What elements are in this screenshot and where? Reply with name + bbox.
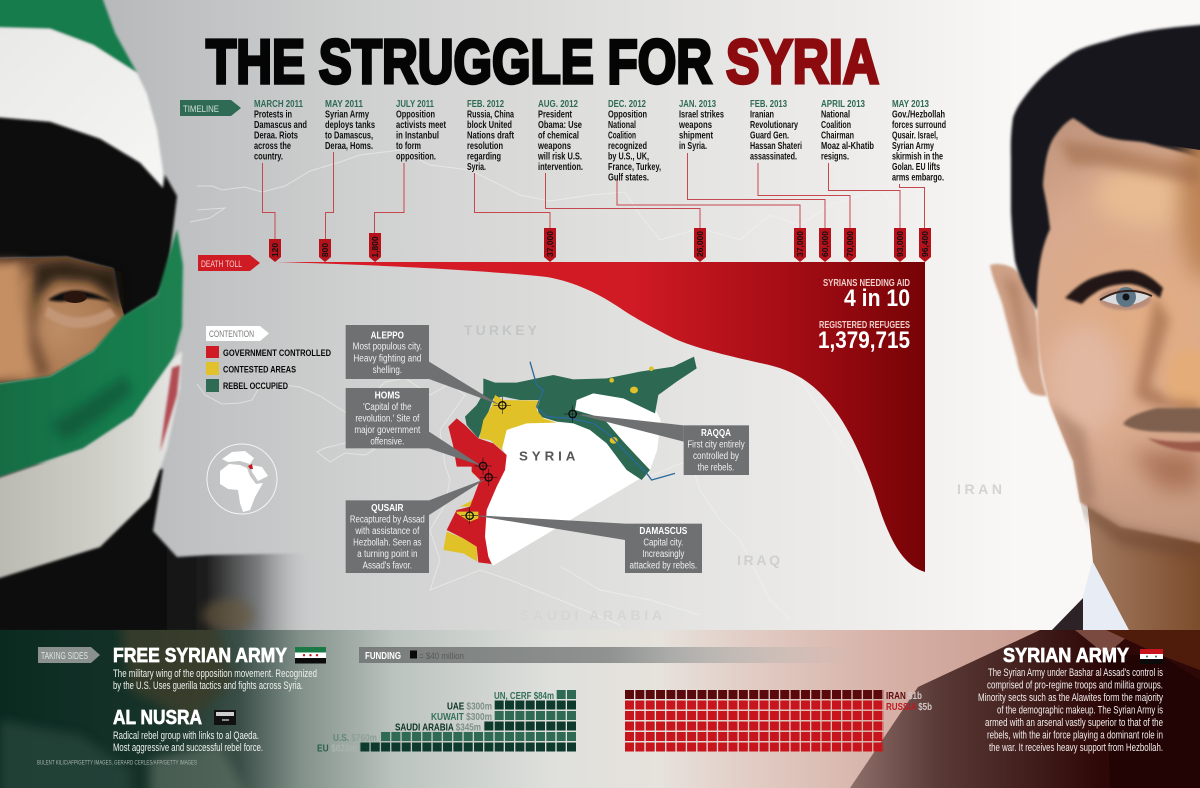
timeline event: May 2013: Gov./Hezbollah [892, 110, 945, 120]
callout: Aleppo: Heavy fighting and [353, 353, 421, 364]
chart: opposition funding labels: UAE $300m [447, 700, 492, 712]
chart: government funding labels [886, 690, 932, 713]
icon: Al Nusra flag [214, 710, 236, 725]
timeline event: Jan 2013: weapons [678, 120, 712, 131]
callout: Damascus: attacked by rebels. [629, 561, 697, 572]
timeline event: July 2011: JULY 2011 [396, 99, 434, 110]
timeline event: Aug 2012: Obama: Use [538, 120, 582, 131]
timeline event: Dec 2012 [608, 99, 661, 184]
timeline arrow [180, 100, 241, 116]
map: contested spots [609, 366, 654, 444]
timeline event: April 2013 [821, 99, 874, 162]
chart: opposition funding labels [317, 690, 554, 754]
timeline event: May 2013: MAY 2013 [892, 99, 929, 110]
statistic: registered refugees: 1,379,715 [818, 327, 910, 354]
timeline event: July 2011: activists meet [396, 120, 446, 131]
chart: opposition funding labels: KUWAIT $300m [431, 711, 492, 723]
callout: Aleppo: Most populous city. [353, 342, 422, 353]
black band [0, 116, 177, 318]
timeline event: Feb 2012: FEB. 2012 [467, 99, 504, 110]
green scarf [0, 229, 183, 484]
hair [1011, 22, 1200, 310]
text: Free Syrian Army description: The military wing of the opposition movement. Recognized [113, 668, 317, 680]
timeline event: May 2013 [892, 99, 946, 184]
timeline event: May 2013: Syrian Army [892, 141, 934, 152]
photo: Bashar al-Assad [990, 22, 1200, 632]
lower white band [0, 351, 182, 584]
taking sides arrow [38, 647, 100, 663]
timeline event: Dec 2012: Coalition [608, 130, 636, 142]
country label: Iraq: IRAQ [737, 552, 780, 568]
death toll markers: 96,400 [920, 231, 930, 257]
timeline event: May 2013: forces surround [892, 120, 946, 131]
icon: locator globe [207, 444, 277, 514]
timeline event: Aug 2012: intervention. [538, 162, 583, 173]
chart: opposition funding labels: EU $820m [317, 742, 357, 754]
timeline event: March 2011: country. [254, 152, 283, 162]
timeline event: Dec 2012: Gulf states. [608, 172, 649, 184]
timeline event: March 2011: Deraa. Riots [254, 130, 298, 142]
face skin [1037, 118, 1200, 547]
chart: government funding squares [625, 694, 884, 747]
background map borders [190, 150, 1010, 625]
callout: Damascus: Increasingly [642, 549, 684, 560]
callout: Qusair: Hezbollah. Seen as [353, 537, 422, 548]
clothing below the mask [0, 460, 320, 632]
map: government controlled areas [447, 418, 507, 564]
death toll markers: 120 [270, 243, 280, 257]
timeline event: May 2013: Golan. EU lifts [892, 162, 940, 173]
callout: Aleppo: ALEPPO [371, 330, 404, 341]
callout: Qusair: a turning point in [357, 549, 417, 560]
death toll markers: 37,000 [545, 231, 555, 257]
death toll arrow: DEATH TOLL [201, 259, 242, 270]
funding legend bar: = $40 million [419, 651, 464, 662]
timeline connector lines [262, 152, 924, 240]
timeline event: July 2011: opposition. [396, 152, 436, 162]
text: Free Syrian Army description [113, 668, 317, 692]
timeline event: May 2011: to Damascus, [325, 130, 373, 142]
timeline event: Feb 2013: Revolutionary [750, 120, 798, 131]
eyebrow [1065, 270, 1163, 304]
timeline event: May 2013: skirmish in the [892, 152, 943, 162]
map: rebel occupied areas [465, 357, 697, 480]
mustache [1123, 408, 1200, 433]
timeline event: Dec 2012: National [608, 120, 636, 131]
legend: contention: GOVERNMENT CONTROLLED [223, 348, 331, 359]
callout: Qusair: QUSAIR [371, 503, 404, 514]
timeline event: May 2013: Qusair. Israel, [892, 130, 938, 142]
timeline event: Jan 2013: in Syria. [679, 141, 707, 152]
legend: contention: CONTESTED AREAS [223, 364, 296, 376]
timeline event: May 2011: Deraa, Homs. [325, 141, 373, 152]
legend: contention: REBEL OCCUPIED [223, 381, 288, 392]
timeline event: Jan 2013: Israel strikes [679, 110, 724, 120]
chart: opposition funding squares [359, 694, 576, 747]
chart: opposition funding labels: U.S. $760m [333, 732, 377, 744]
heading: Syrian Army: SYRIAN ARMY [1003, 645, 1130, 667]
timeline event: Aug 2012 [537, 99, 583, 173]
chart: government funding labels: IRAN $1b [886, 690, 922, 702]
chart: opposition funding labels: UN, CERF $84m [494, 690, 554, 702]
timeline event: Jan 2013: shipment [679, 130, 714, 142]
map of Syria [346, 325, 749, 573]
chart: government funding labels: RUSSIA $5b [886, 701, 932, 713]
country label: Iran: IRAN [957, 481, 1002, 497]
callout: Damascus: Capital city. [643, 538, 683, 549]
callout: Raqqa: the rebels. [698, 463, 734, 474]
timeline event: April 2013: Chairman [821, 130, 854, 142]
timeline event: Dec 2012: DEC. 2012 [608, 99, 646, 110]
callout: Homs: revolution.' Site of [355, 414, 420, 425]
map: contested areas [443, 395, 557, 562]
timeline event: April 2013: Moaz al-Khatib [821, 141, 874, 152]
death toll markers: 1,800 [370, 236, 380, 258]
timeline arrow: TIMELINE [183, 104, 219, 115]
text: Al Nusra description [113, 730, 263, 754]
timeline event: Feb 2013: assassinated. [750, 152, 797, 162]
timeline event: Dec 2012: France, Turkey, [608, 162, 661, 173]
timeline event: Aug 2012: weapons [537, 141, 571, 152]
bottom strip [0, 620, 1200, 788]
funding legend bar [359, 647, 859, 663]
text: Syrian Army description [978, 667, 1163, 754]
timeline event: July 2011 [396, 99, 446, 162]
photo: masked rebel fighter [0, 0, 320, 632]
death toll markers: 26,000 [695, 231, 705, 257]
timeline event: March 2011 [254, 99, 307, 162]
callout: Raqqa: controlled by [693, 451, 739, 462]
icon: Syrian flag [1140, 649, 1163, 664]
map: city targets [461, 397, 581, 524]
title: THE STRUGGLE FOR [206, 28, 712, 97]
eye [48, 290, 112, 302]
callout: Aleppo [346, 325, 500, 405]
timeline event: April 2013: resigns. [821, 152, 849, 162]
death toll wedge chart [276, 262, 925, 572]
map: government-free white area [485, 393, 660, 565]
statistic: Syrians needing aid [823, 278, 910, 312]
timeline event: Feb 2013: FEB. 2013 [750, 99, 787, 110]
timeline event: July 2011: to form [396, 141, 421, 152]
hat green [0, 0, 137, 73]
heading: Al Nusra: AL NUSRA [113, 707, 202, 729]
callout: Homs: 'Capital of the [363, 402, 412, 413]
country label: Saudi Arabia: SAUDI ARABIA [520, 607, 662, 623]
callout: Raqqa: RAQQA [701, 428, 731, 439]
timeline event: May 2013: arms embargo. [892, 172, 944, 184]
statistic: Syrians needing aid: SYRIANS NEEDING AID [823, 278, 910, 289]
map: Damascus contested pocket [457, 512, 478, 522]
callout: Homs: major government [354, 425, 421, 436]
funding legend bar: FUNDING [365, 651, 401, 662]
timeline event: March 2011: Protests in [254, 110, 292, 120]
callout: Homs [346, 388, 482, 466]
timeline event: Jan 2013 [678, 99, 724, 152]
mouth [1147, 438, 1200, 452]
timeline event: Feb 2013 [750, 99, 802, 162]
face opening [0, 257, 125, 386]
timeline event: Feb 2013: Guard Gen. [750, 130, 789, 142]
death toll arrow [198, 255, 260, 271]
callout: Raqqa: First city entirely [687, 440, 745, 451]
death toll markers: 60,000 [820, 231, 830, 257]
timeline event: May 2011: deploys tanks [325, 120, 375, 131]
timeline event: May 2011: MAY 2011 [325, 99, 363, 110]
death toll markers: 37,000 [795, 231, 805, 257]
callout: Qusair: with assistance of [355, 526, 420, 537]
timeline event: Aug 2012: AUG. 2012 [538, 99, 578, 110]
timeline event: April 2013: Coalition [821, 120, 851, 131]
ear [990, 264, 1047, 396]
timeline event: Feb 2013: Iranian [750, 110, 774, 120]
legend: contention: CONTENTION [209, 329, 254, 340]
hat white band [0, 27, 163, 192]
callout: Damascus: DAMASCUS [639, 526, 687, 537]
text: Free Syrian Army description: by the U.S. Uses guerilla tactics and fights across Syria. [113, 680, 303, 692]
death toll markers [269, 228, 931, 262]
statistic: registered refugees: REGISTERED REFUGEES [819, 320, 910, 331]
timeline event: July 2011: Opposition [396, 110, 435, 120]
timeline event: March 2011: MARCH 2011 [254, 99, 303, 110]
callout: Raqqa [573, 413, 749, 475]
timeline event: April 2013: National [821, 110, 850, 120]
callout: Qusair: Recaptured by Assad [350, 515, 425, 526]
timeline event: March 2011: across the [254, 141, 291, 152]
icon: Free Syrian Army flag [295, 647, 326, 664]
title: SYRIA [726, 28, 879, 97]
death toll markers: 800 [320, 243, 330, 257]
text: Al Nusra description: Most aggressive and successful rebel force. [113, 742, 263, 754]
timeline event: Feb 2012 [467, 99, 515, 173]
callout: Homs: HOMS [375, 390, 400, 401]
text: Al Nusra description: Radical rebel group with links to al Qaeda. [113, 730, 259, 742]
timeline event: Dec 2012: recognized [608, 141, 647, 152]
callout: Qusair: Assad's favor. [363, 561, 412, 572]
heading: Free Syrian Army: FREE SYRIAN ARMY [113, 645, 288, 667]
map: Euphrates river [530, 362, 675, 480]
timeline event: Feb 2013: Hassan Shateri [750, 141, 802, 152]
timeline event: Dec 2012: by U.S., UK, [608, 152, 649, 162]
callout: Aleppo: shelling. [373, 365, 402, 376]
callout: Homs: offensive. [370, 437, 404, 448]
death toll markers: 70,000 [845, 231, 855, 257]
timeline event: Jan 2013: JAN. 2013 [679, 99, 716, 110]
country label: Turkey: TURKEY [464, 322, 538, 338]
timeline event: April 2013: APRIL 2013 [821, 99, 865, 110]
timeline event: Aug 2012: of chemical [538, 130, 579, 142]
timeline event: Feb 2012: Nations draft [467, 130, 515, 142]
timeline event: Feb 2012: block United [467, 120, 512, 131]
chart: opposition funding labels: SAUDI ARABIA $345m [395, 722, 481, 734]
callout: Damascus [472, 515, 702, 573]
map label: Syria: SYRIA [519, 449, 576, 464]
timeline event: Aug 2012: will risk U.S. [537, 152, 582, 162]
timeline event: March 2011: Damascus and [254, 120, 307, 131]
timeline event: Feb 2012: Russia, China [467, 110, 514, 120]
death toll markers: 93,000 [895, 231, 905, 257]
taking sides arrow: TAKING SIDES [41, 651, 88, 662]
timeline event: May 2011: Syrian Army [325, 110, 369, 120]
legend: contention [206, 326, 331, 392]
neck and collar [1050, 596, 1085, 632]
photo credit: BULENT KILIC/AFP/GETTY IMAGES, GERARD CERLES/AFP/GETTY IMAGES [37, 760, 197, 766]
timeline event: Dec 2012: Opposition [608, 110, 647, 120]
eye [1099, 288, 1151, 310]
callout: Qusair [346, 478, 487, 573]
timeline event: Aug 2012: President [538, 110, 572, 120]
timeline event: Feb 2012: Syria. [467, 162, 486, 173]
timeline event: July 2011: in Instanbul [396, 130, 439, 142]
statistic: Syrians needing aid: 4 in 10 [844, 285, 910, 312]
timeline event: May 2011 [325, 99, 375, 152]
timeline event: Feb 2012: regarding [467, 152, 501, 162]
timeline event: Feb 2012: resolution [467, 141, 503, 152]
